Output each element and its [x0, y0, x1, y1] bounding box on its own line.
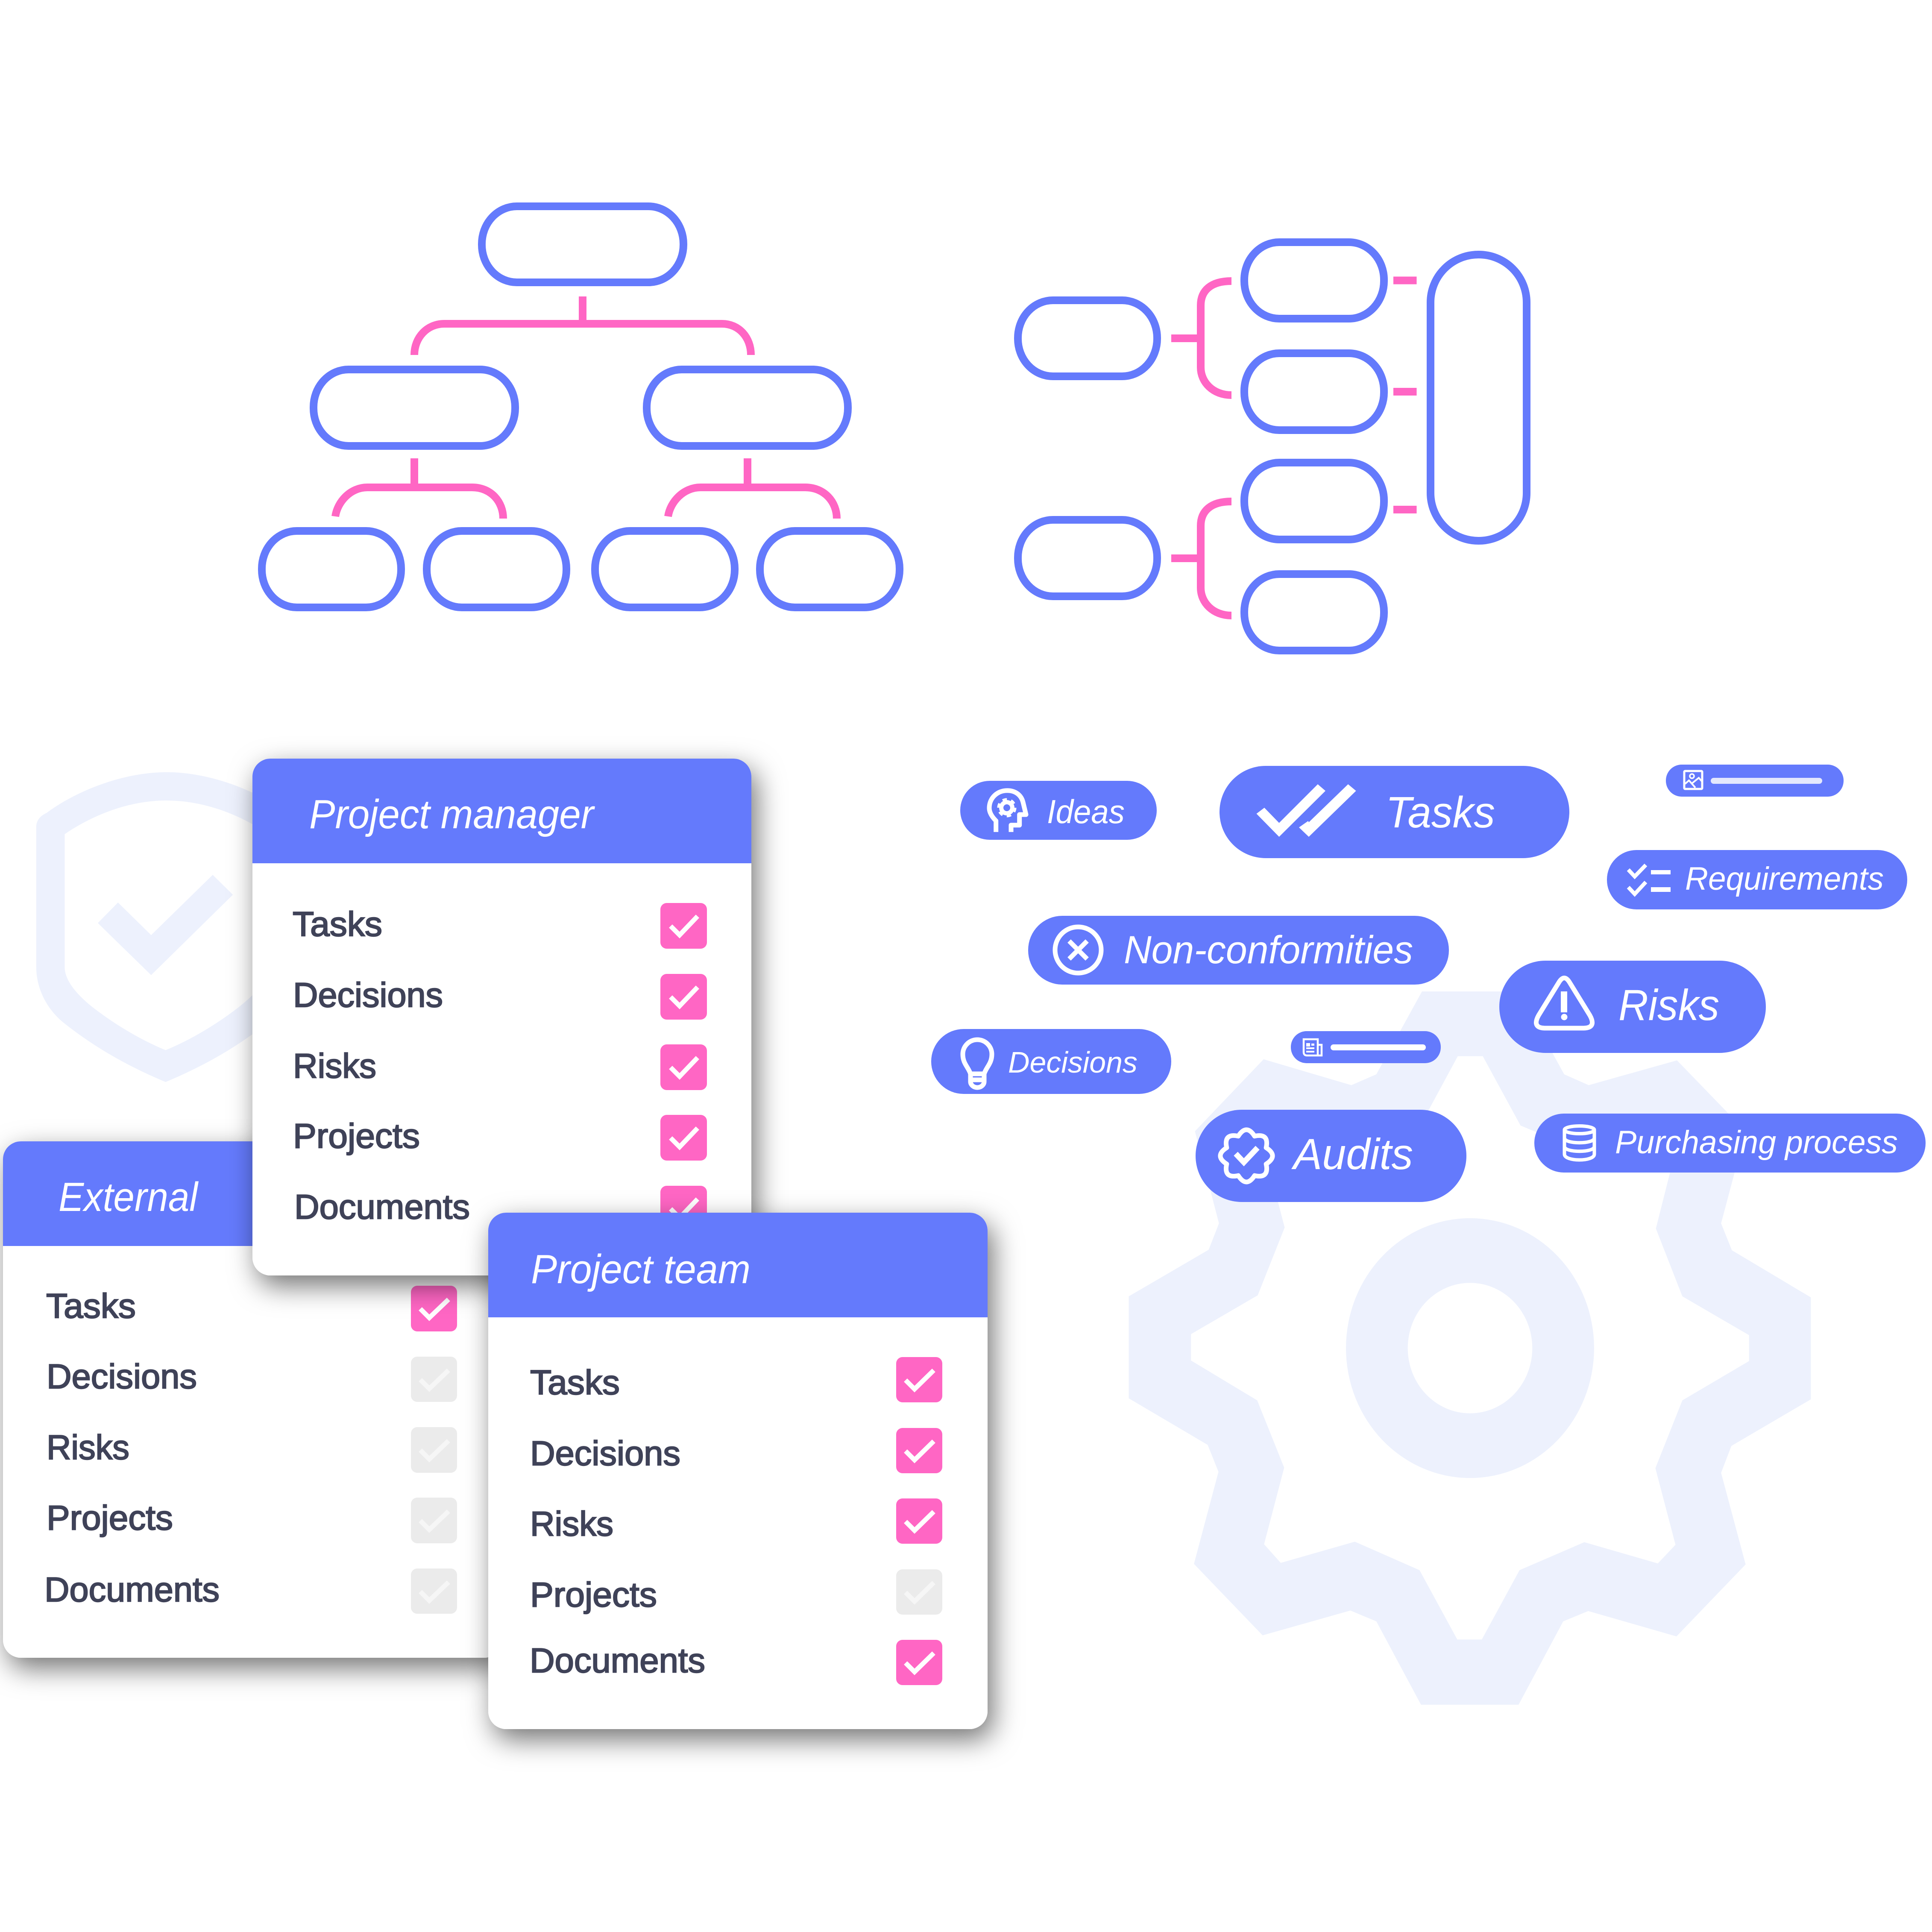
row: Projects unchecked: Projects: [530, 1576, 657, 1614]
row: Decisions unchecked: [47, 1357, 457, 1402]
card body: Project manager: [252, 759, 751, 1275]
row: Risks unchecked: [47, 1427, 457, 1473]
row: Documents checked: Documents: [294, 1188, 470, 1226]
flow diagram: merging branches: [1018, 242, 1527, 651]
tag: Non-conformities: [1028, 916, 1449, 985]
flow node: upper source: [1018, 300, 1157, 376]
org chart: tree hierarchy: [262, 206, 900, 607]
icon: verified badge: [1220, 1130, 1272, 1182]
row: Documents unchecked: [44, 1568, 457, 1614]
flow node: lower source: [1018, 520, 1157, 596]
row: Projects unchecked: [47, 1498, 457, 1543]
icon: picture: [1684, 771, 1702, 789]
row: Risks checked: Risks: [530, 1505, 613, 1543]
tag: Purchasing process: [1534, 1114, 1926, 1173]
icon: newspaper: [1304, 1039, 1322, 1055]
row: Tasks checked: Tasks: [530, 1363, 620, 1402]
row: Documents checked: Documents: [530, 1642, 705, 1680]
row: Risks checked: Risks: [293, 1047, 376, 1085]
row: Tasks checked: Tasks: [293, 905, 382, 944]
flow node: middle four: [1244, 574, 1384, 651]
placeholder line: [1331, 1044, 1426, 1050]
row: Tasks checked: [530, 1357, 942, 1402]
row: Tasks checked: Tasks: [46, 1287, 136, 1325]
tree node: level two left: [314, 369, 515, 446]
row: Risks unchecked: Risks: [47, 1428, 129, 1467]
row: Tasks checked: [46, 1286, 457, 1331]
tag: Requirements: [1607, 850, 1907, 909]
row: Decisions checked: Decisions: [293, 976, 443, 1014]
card body: Project team: [488, 1213, 988, 1729]
tree connector: left branch: [335, 458, 503, 519]
card: Project team: [488, 1213, 988, 1729]
background icon: shield with check: [36, 772, 297, 1082]
row: Decisions unchecked: Decisions: [47, 1357, 197, 1396]
card header: Project manager: Project manager: [309, 792, 595, 837]
flow bracket: lower: [1171, 501, 1231, 616]
tag: Tasks: Tasks: [1386, 788, 1495, 837]
tree node: level two right: [647, 369, 848, 446]
flow node: merged tall pill: [1431, 255, 1527, 541]
tree node: root: [482, 206, 683, 282]
card: Project manager: [252, 759, 751, 1275]
tag: Ideas: [960, 781, 1157, 840]
flow dashes to merged node: [1393, 280, 1416, 510]
tag: Decisions: Decisions: [1008, 1046, 1138, 1079]
row: Risks checked: [530, 1498, 942, 1544]
flow node: middle three: [1244, 463, 1384, 539]
tree node: leaf two: [427, 531, 566, 607]
card header: Project manager: [252, 759, 751, 863]
row: Documents checked: [530, 1640, 942, 1685]
tag: Risks: [1499, 961, 1766, 1053]
row: Projects checked: Projects: [293, 1117, 420, 1155]
row: Projects checked: [293, 1115, 707, 1161]
tag: document placeholder: [1291, 1031, 1441, 1063]
flow node: middle two: [1244, 353, 1384, 430]
icon: double check: [1257, 784, 1356, 837]
placeholder line: [1711, 778, 1822, 784]
row: Decisions checked: [293, 974, 707, 1020]
card header: Project team: [488, 1213, 988, 1317]
tree node: leaf four: [760, 531, 900, 607]
row: Decisions checked: Decisions: [530, 1434, 680, 1473]
background icon: gear: [1129, 991, 1811, 1705]
tree node: leaf three: [595, 531, 735, 607]
row: Documents unchecked: Documents: [44, 1571, 220, 1609]
tree connector: root to level two: [414, 296, 751, 355]
tag: image placeholder: [1666, 765, 1844, 797]
tag: Ideas: Ideas: [1047, 793, 1125, 830]
icon: circled x: [1055, 927, 1101, 973]
tag: Requirements: Requirements: [1685, 861, 1884, 897]
row: Projects unchecked: [530, 1569, 942, 1615]
tag: Decisions: [931, 1029, 1171, 1094]
tag: Purchasing process: Purchasing process: [1615, 1124, 1898, 1161]
tag: Audits: Audits: [1291, 1130, 1413, 1179]
icon: light bulb: [963, 1040, 992, 1088]
row: Risks checked: [293, 1044, 707, 1090]
card header: External: External: [59, 1174, 199, 1220]
row: Documents checked: [294, 1186, 707, 1231]
flow node: middle one: [1244, 242, 1384, 319]
row: Decisions checked: [530, 1428, 942, 1473]
tree node: leaf one: [262, 531, 401, 607]
row: Tasks checked: [293, 903, 707, 949]
card: External: [3, 1141, 502, 1658]
flow bracket: upper: [1171, 281, 1231, 395]
card header: Project team: Project team: [531, 1246, 751, 1292]
tag: Tasks: [1220, 766, 1569, 858]
row: Projects unchecked: Projects: [47, 1499, 173, 1537]
icon: checklist: [1628, 865, 1671, 894]
card body: External: [3, 1141, 502, 1658]
tag: Non-conformities: Non-conformities: [1124, 928, 1413, 972]
icon: database: [1564, 1126, 1594, 1160]
tree connector: right branch: [668, 458, 837, 519]
icon: warning triangle: [1536, 978, 1592, 1028]
icon: head with gear: [989, 791, 1026, 832]
tag: Audits: [1196, 1110, 1466, 1202]
tag: Risks: Risks: [1618, 981, 1719, 1029]
card header: External: [3, 1141, 502, 1246]
